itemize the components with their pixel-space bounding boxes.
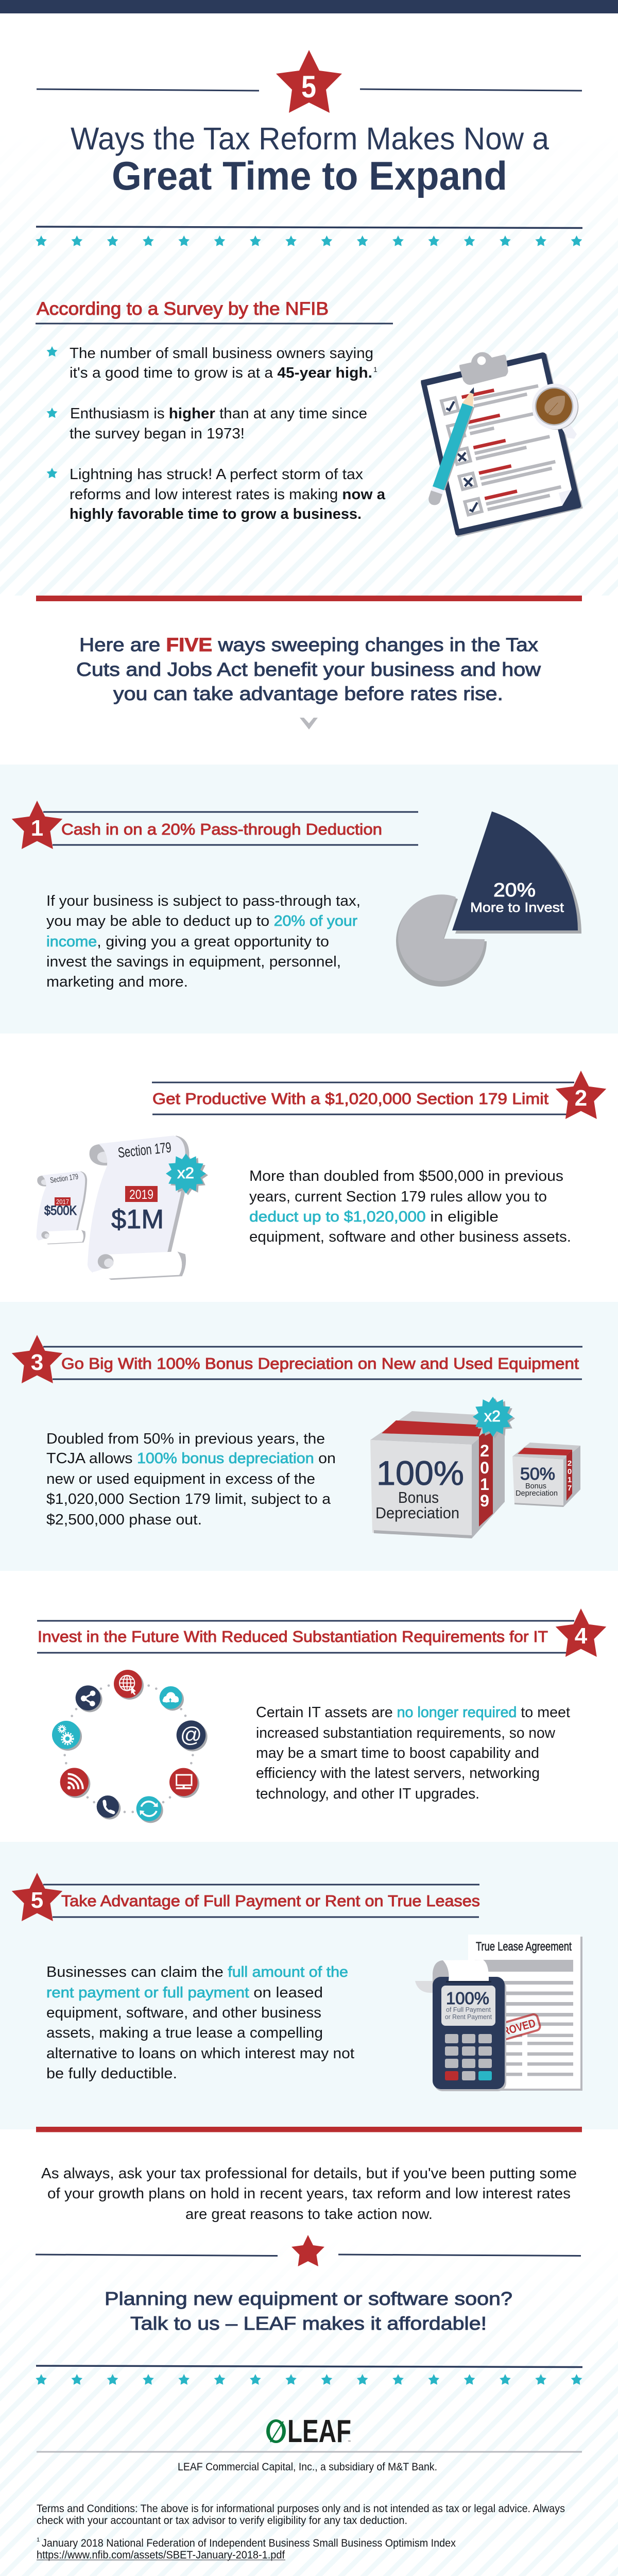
heading 3: Go Big With 100% Bonus Depreciation on New and Used Equipment xyxy=(61,1354,579,1372)
icon: chevron down xyxy=(300,718,318,730)
icon: big 2019 box: x2 xyxy=(484,1407,501,1425)
red divider xyxy=(36,2127,582,2132)
body 3 xyxy=(46,1431,336,1528)
star badge 1: 1 xyxy=(31,816,43,841)
body 5: alternative to loans on which interest may not xyxy=(46,2045,354,2062)
title line 1: Ways the Tax Reform Makes Now a xyxy=(71,121,549,156)
approved stamp: APPROVED xyxy=(482,2016,537,2043)
icon: big 2019 box: 9 xyxy=(480,1492,489,1510)
body 2: deduct up to $1,020,000 in eligible xyxy=(249,1209,499,1225)
heading 1: Cash in on a 20% Pass-through Deduction xyxy=(61,820,382,838)
intro text: Cuts and Jobs Act benefit your business and how xyxy=(76,659,541,680)
terms and conditions: Terms and Conditions: The above is for informational purposes only and is not intended as tax or legal advice. Always xyxy=(37,2503,565,2515)
body 1: invest the savings in equipment, personnel, xyxy=(46,954,341,970)
logo: LEAF: LEAF xyxy=(287,2414,351,2449)
panel: way 4 xyxy=(37,1608,606,1823)
closing paragraph: are great reasons to take action now. xyxy=(185,2206,433,2223)
body 1 xyxy=(46,893,360,990)
icon: small 2017 scroll: $500K xyxy=(44,1204,77,1218)
call to action xyxy=(105,2288,512,2334)
bullet 3 xyxy=(46,466,386,522)
icon: at sign xyxy=(177,1720,205,1750)
body 3: Doubled from 50% in previous years, the xyxy=(46,1431,325,1447)
icon ring: technology xyxy=(52,1670,208,1823)
body 4: may be a smart time to boost capability and xyxy=(256,1745,539,1761)
icon: big 2019 box: 2 xyxy=(480,1442,489,1460)
icon: small 2017 box: 2 xyxy=(568,1459,572,1468)
icon: monitor xyxy=(169,1768,198,1796)
icon: small 2017 box: Depreciation xyxy=(516,1489,558,1498)
icon: big 2019 box: Depreciation xyxy=(375,1504,459,1522)
body 5: assets, making a true lease a compelling xyxy=(46,2025,323,2041)
terms and conditions: check with your accountant or tax advisor to verify eligibility for any tax deduction. xyxy=(37,2515,407,2527)
star badge 1 xyxy=(12,801,62,849)
body 4: Certain IT assets are no longer required to meet xyxy=(256,1704,570,1721)
icon: big 2019 box: Bonus xyxy=(398,1488,439,1506)
bullet 3: highly favorable time to grow a business. xyxy=(70,506,362,522)
heading 4: Invest in the Future With Reduced Substantiation Requirements for IT xyxy=(38,1628,548,1646)
bullet 3: Lightning has struck! A perfect storm of tax xyxy=(70,466,364,483)
body 4: efficiency with the latest servers, networking xyxy=(256,1765,540,1782)
intro text: you can take advantage before rates rise. xyxy=(113,683,503,704)
body 5: Businesses can claim the full amount of the xyxy=(46,1964,348,1980)
body 5 xyxy=(46,1964,354,2082)
icon: big 2019 box xyxy=(370,1397,515,1538)
icon: share xyxy=(76,1685,100,1710)
star badge 5: 5 xyxy=(31,1888,43,1913)
star badge 5: 5 xyxy=(301,70,316,104)
logo: LEAF: ™ xyxy=(348,2440,351,2444)
background stripes bottom xyxy=(0,2236,618,2576)
logo: LEAF xyxy=(266,2414,351,2449)
bullet 1: it's a good time to grow is at a 45-year high. xyxy=(70,365,372,381)
top bar xyxy=(0,0,618,13)
star badge 3 xyxy=(12,1335,62,1383)
pie chart: 20 percent: More to Invest xyxy=(470,900,564,915)
footnote: 1 xyxy=(37,2537,40,2543)
body 2: equipment, software and other business assets. xyxy=(249,1229,571,1245)
star badge 2 xyxy=(556,1071,606,1119)
icon: rss xyxy=(60,1768,89,1797)
star badge 5 xyxy=(276,50,342,113)
icon: gears xyxy=(52,1721,80,1749)
star badge 4 xyxy=(556,1608,606,1657)
closing paragraph: As always, ask your tax professional for details, but if you've been putting some xyxy=(41,2165,577,2182)
body 2 xyxy=(249,1168,571,1245)
icon: big 2019 box: 100% xyxy=(376,1454,464,1492)
body 4: technology, and other IT upgrades. xyxy=(256,1786,479,1802)
star badge 4: 4 xyxy=(575,1623,588,1649)
title line 2: Great Time to Expand xyxy=(112,153,507,198)
body 1: you may be able to deduct up to 20% of your xyxy=(46,913,357,929)
footnote xyxy=(37,2537,456,2561)
body 1: marketing and more. xyxy=(46,974,188,990)
call to action: Planning new equipment or software soon? xyxy=(105,2288,512,2309)
body 4: increased substantiation requirements, so now xyxy=(256,1725,556,1741)
icon: big 2019 box: 1 xyxy=(480,1475,489,1494)
footnote: January 2018 National Federation of Independent Business Small Business Optimism Index xyxy=(42,2537,456,2549)
body 3: TCJA allows 100% bonus depreciation on xyxy=(46,1450,336,1467)
icon: small 2017 box: 1 xyxy=(568,1476,572,1484)
survey heading: According to a Survey by the NFIB xyxy=(37,299,329,319)
panel: way 3 xyxy=(0,1302,618,1571)
icon: phone xyxy=(97,1795,119,1818)
closing paragraph xyxy=(41,2165,577,2223)
heading 2: Get Productive With a $1,020,000 Section 179 Limit xyxy=(152,1090,548,1108)
pie chart: 20 percent: 20% xyxy=(493,879,536,901)
icon: small 2017 box: Bonus xyxy=(525,1482,546,1490)
body 1: income, giving you a great opportunity to xyxy=(46,934,329,950)
icon: payment terminal xyxy=(415,1960,506,2091)
star row xyxy=(36,2374,582,2385)
icon: small 2017 box: 50% xyxy=(520,1464,555,1483)
icon: small 2017 scroll: Section 179 xyxy=(49,1172,79,1185)
body 2: More than doubled from $500,000 in previous xyxy=(249,1168,563,1184)
terms and conditions xyxy=(37,2503,565,2527)
closing paragraph: of your growth plans on hold in recent years, tax reform and low interest rates xyxy=(47,2185,571,2202)
body 3: new or used equipment in excess of the xyxy=(46,1471,315,1487)
panel: way 2 xyxy=(36,1071,606,1280)
star badge 2: 2 xyxy=(575,1086,587,1111)
footnote: https://www.nfib.com/assets/SBET-January-2018-1.pdf xyxy=(37,2549,285,2561)
intro text: Here are FIVE ways sweeping changes in the Tax xyxy=(79,634,539,655)
icon: globe xyxy=(114,1670,142,1698)
bullet 2: Enthusiasm is higher than at any time since xyxy=(70,405,367,422)
icon: payment terminal: or Rent Payment xyxy=(445,2013,492,2021)
icon: big 2019 scroll: x2 xyxy=(177,1164,194,1182)
icon: sync xyxy=(136,1796,161,1821)
panel: NFIB survey xyxy=(36,299,583,537)
icon: small 2017 box: 7 xyxy=(568,1484,572,1493)
pie chart: 20 percent xyxy=(396,811,581,987)
icon: true lease agreement document: True Lease Agreement xyxy=(476,1940,572,1954)
body 1: If your business is subject to pass-through tax, xyxy=(46,893,360,909)
icon: small 2017 box xyxy=(512,1443,580,1507)
body 4 xyxy=(256,1704,570,1802)
body 5: rent payment or full payment on leased xyxy=(46,1985,323,2001)
star row xyxy=(36,235,582,246)
bullet 2: the survey began in 1973! xyxy=(70,426,245,442)
call to action: Talk to us – LEAF makes it affordable! xyxy=(130,2313,487,2334)
panel: way 5 xyxy=(0,1842,618,2129)
icon: small 2017 scroll xyxy=(36,1171,87,1244)
body 5: equipment, software, and other business xyxy=(46,2005,321,2021)
icon: big 2019 scroll: Section 179 xyxy=(117,1139,172,1161)
bullet 1 xyxy=(46,345,377,381)
bullet 1: 1 xyxy=(373,365,377,374)
icon: clipboard with pencil and coffee xyxy=(421,352,583,537)
icon: small 2017 scroll: 2017 xyxy=(56,1198,69,1206)
body 2: years, current Section 179 rules allow you to xyxy=(249,1189,547,1205)
icon: big 2019 box: 0 xyxy=(480,1459,489,1477)
icon: small 2017 box: 0 xyxy=(568,1467,572,1476)
bullet 2 xyxy=(46,405,367,442)
bullet 1: The number of small business owners saying xyxy=(70,345,373,362)
intro text xyxy=(76,634,541,704)
icon: at sign: @ xyxy=(180,1723,202,1747)
star badge 5 xyxy=(12,1873,62,1921)
red divider xyxy=(36,596,582,601)
body 3: $1,020,000 Section 179 limit, subject to a xyxy=(46,1491,331,1507)
icon: payment terminal: 100% xyxy=(446,1989,489,2008)
star divider xyxy=(36,2235,581,2266)
bullet 3: reforms and low interest rates is making now a xyxy=(70,486,386,503)
company line: LEAF Commercial Capital, Inc., a subsidiary of M&T Bank. xyxy=(178,2461,437,2473)
body 3: $2,500,000 phase out. xyxy=(46,1512,202,1528)
background stripes top xyxy=(0,13,618,596)
panel: way 1 xyxy=(0,765,618,1033)
icon: big 2019 scroll xyxy=(88,1136,208,1280)
icon: big 2019 scroll: $1M xyxy=(111,1205,164,1234)
icon: payment terminal: of Full Payment xyxy=(446,2006,491,2013)
header xyxy=(36,50,582,246)
icon: big 2019 scroll: 2019 xyxy=(129,1188,153,1202)
star badge 3: 3 xyxy=(31,1350,43,1375)
icon: cloud xyxy=(160,1686,182,1709)
heading 5: Take Advantage of Full Payment or Rent on True Leases xyxy=(61,1892,480,1910)
body 5: be fully deductible. xyxy=(46,2065,177,2082)
icon: true lease agreement document xyxy=(468,1935,582,2091)
